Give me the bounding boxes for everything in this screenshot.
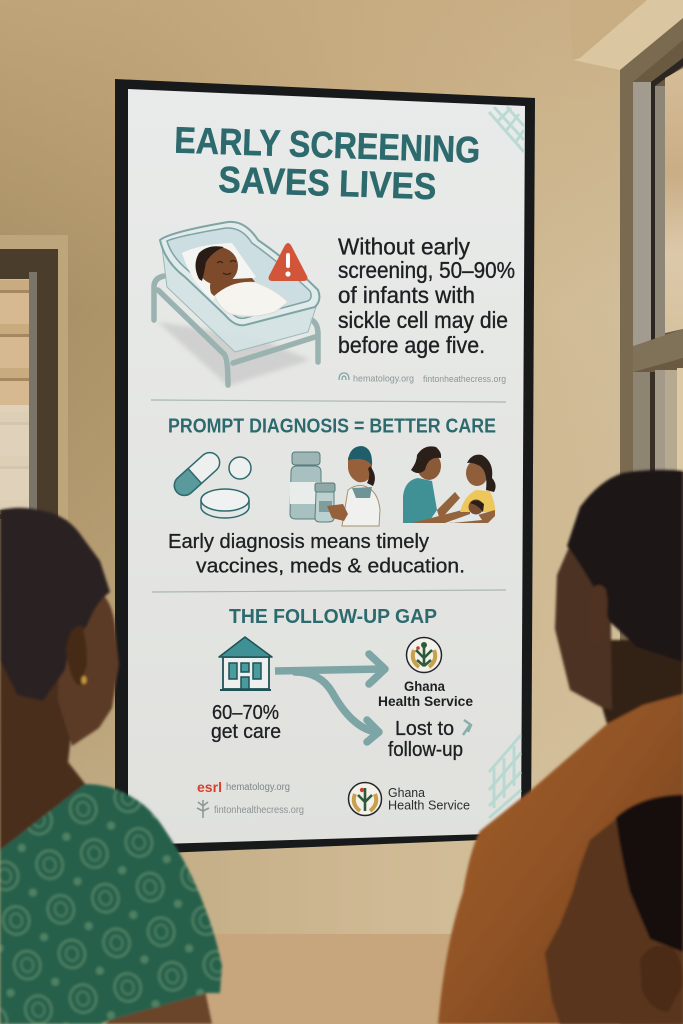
statistic text: screening, 50–90%: [338, 257, 515, 283]
source line: fintonheathecress.org: [423, 374, 506, 385]
arm: [105, 990, 212, 1024]
ceiling soffit: [569, 0, 683, 70]
heading: prompt diagnosis: PROMPT DIAGNOSIS = BETTER CARE: [168, 416, 496, 438]
early diagnosis text: [168, 531, 465, 578]
statistic text: of infants with: [338, 282, 475, 308]
statistic text: sickle cell may die: [338, 307, 508, 333]
right window: [620, 18, 683, 1024]
green patterned dress: [0, 784, 222, 1024]
title: EARLY SCREENING: [174, 120, 481, 171]
footer sources: [197, 779, 304, 818]
neck: [590, 640, 683, 724]
icon: Ghana Health Service emblem: [406, 638, 442, 672]
left window: [0, 235, 68, 520]
heading: follow-up gap: THE FOLLOW-UP GAP: [229, 605, 437, 628]
early diagnosis text: Early diagnosis means timely: [168, 531, 429, 553]
icon: bassinet with sleeping infant: [154, 222, 319, 386]
footer Ghana Health Service logo: Health Service: [388, 798, 470, 812]
title: [174, 120, 481, 207]
Ghana Health Service label: [378, 679, 473, 709]
hair: [0, 508, 110, 701]
icon: house: [219, 637, 272, 690]
footer Ghana Health Service logo: [348, 782, 470, 816]
source line: hematology.org: [353, 374, 414, 384]
ear: [66, 626, 87, 686]
viewer: woman on left: [0, 508, 222, 1024]
footer sources: esrl: [197, 779, 222, 795]
neck and shoulders: [0, 640, 90, 860]
care percentage text: 60–70%: [212, 701, 279, 724]
poster frame: [115, 79, 535, 855]
icon: caregiver and mother with baby: [403, 446, 496, 523]
lost to follow-up text: Lost to: [395, 718, 454, 740]
title: SAVES LIVES: [218, 159, 437, 207]
baby head: [198, 247, 238, 285]
ear: [589, 585, 608, 645]
arrows: care split: [275, 654, 385, 742]
viewer: child in foreground: [545, 795, 683, 1024]
corner motif top right: [489, 107, 524, 152]
care percentage text: [211, 701, 281, 743]
corner motif bottom right: [489, 735, 521, 818]
lost to follow-up text: follow-up: [388, 739, 463, 761]
Ghana Health Service label: Health Service: [378, 694, 473, 709]
statistic text: before age five.: [338, 332, 485, 358]
icon: pills: [170, 449, 251, 518]
face: [58, 590, 119, 746]
source line: [339, 373, 506, 385]
icon: pharmacist with bottles: [290, 446, 380, 526]
earring: [82, 676, 86, 684]
footer sources: hematology.org: [226, 782, 290, 793]
statistic text: [338, 234, 515, 358]
pillow: [182, 243, 256, 300]
lost to follow-up text: [388, 718, 463, 761]
poster panel: [128, 89, 525, 845]
early diagnosis text: vaccines, meds & education.: [196, 556, 465, 578]
Ghana Health Service label: Ghana: [404, 679, 445, 694]
hair: [567, 470, 683, 662]
statistic text: Without early: [338, 234, 470, 260]
face: [545, 816, 683, 1024]
face: [555, 545, 612, 710]
viewer: man on right: [438, 470, 683, 1024]
orange shirt: [438, 694, 683, 1024]
icon: warning triangle: [268, 243, 308, 281]
ear: [640, 946, 683, 1012]
care percentage text: get care: [211, 720, 281, 743]
footer Ghana Health Service logo: Ghana: [388, 786, 425, 800]
blanket: [214, 282, 288, 316]
icon: small arrow: [463, 720, 471, 735]
footer sources: fintonhealthecress.org: [214, 805, 304, 816]
hair: [616, 795, 683, 952]
